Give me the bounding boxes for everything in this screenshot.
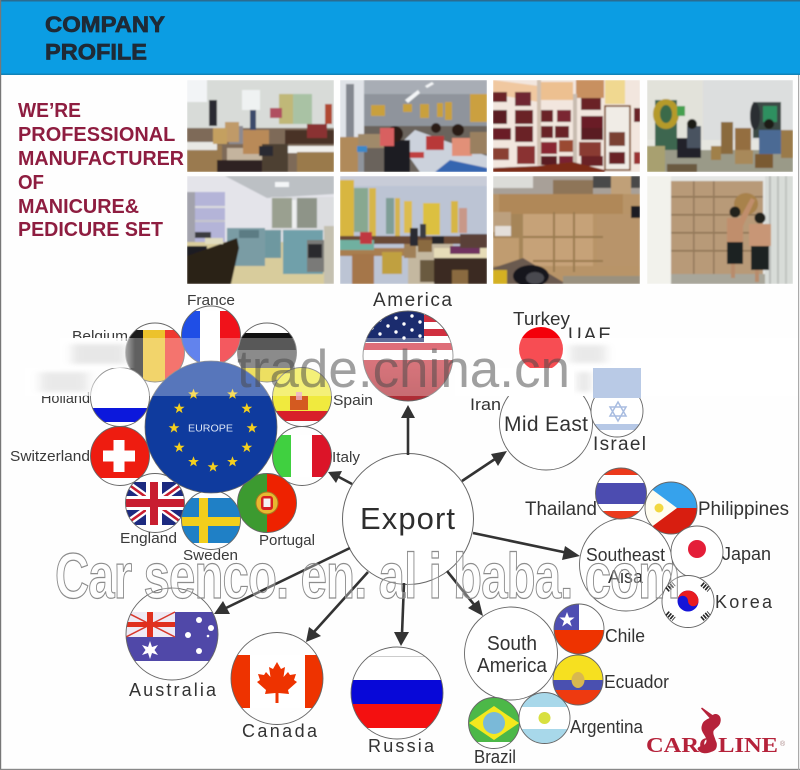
heading: company profile: COMPANY	[45, 12, 165, 37]
labels: Southeast Asia countries: Thailand	[525, 499, 597, 520]
flag: England	[125, 474, 185, 532]
flag: Philippines	[642, 482, 697, 534]
photo: loading container	[647, 176, 793, 284]
label: America: America	[373, 290, 452, 311]
labels: Mid East countries	[470, 395, 646, 455]
flag: Portugal	[237, 473, 298, 533]
flag: Germany	[237, 323, 297, 388]
panel: South America circle: South	[487, 633, 537, 655]
labels: Australia, Canada, Russia: Russia	[368, 736, 435, 756]
flag: France	[181, 306, 241, 362]
flag: Turkey	[519, 327, 563, 371]
flag: Israel	[590, 398, 644, 438]
labels: Mid East countries: Israel	[593, 434, 646, 455]
photo: press machines	[647, 80, 793, 172]
panel: South America circle: America	[477, 655, 548, 677]
photo: showroom shelves	[493, 80, 640, 172]
arrow: to South America	[447, 571, 483, 616]
label: Turkey: Turkey	[513, 309, 570, 329]
text block: professional manufacturer: OF	[18, 172, 44, 194]
flag: Belgium	[125, 322, 185, 382]
flag: Australia	[126, 588, 218, 680]
panel: Southeast Asia circle: Southeast	[586, 545, 665, 565]
arrow: to Canada	[306, 572, 368, 642]
arrow: to Italy	[328, 471, 352, 484]
text block: professional manufacturer: PEDICURE SET	[18, 219, 163, 241]
photo: office	[187, 176, 334, 284]
labels: Australia, Canada, Russia: Canada	[242, 721, 318, 741]
text block: professional manufacturer: MANICURE&	[18, 196, 139, 218]
panel: Mid East circle	[500, 377, 592, 470]
flag: Thailand	[595, 468, 647, 520]
labels: Europe countries: Holland	[41, 390, 90, 407]
flag: Brazil	[468, 697, 520, 749]
labels: South America countries: Brazil	[474, 747, 516, 767]
label: UAE: UAE	[568, 325, 611, 346]
labels: Southeast Asia countries: Philippines	[698, 499, 789, 520]
photo: workers at table	[340, 80, 487, 172]
logo: Caroline	[646, 708, 786, 757]
photo: workshop with boxes	[187, 80, 334, 172]
labels: Europe countries: Belgium	[72, 328, 128, 345]
photo: workshop with curtains	[340, 176, 487, 284]
text block: professional manufacturer: PROFESSIONAL	[18, 124, 175, 146]
flag: Italy	[272, 426, 332, 486]
labels: Australia, Canada, Russia	[129, 680, 435, 756]
flag: Ecuador	[552, 655, 604, 706]
labels: Europe countries	[10, 292, 373, 564]
panel: South America circle	[464, 607, 558, 700]
labels: Europe countries: Italy	[332, 449, 361, 466]
heading: company profile: PROFILE	[45, 40, 147, 64]
labels: Europe countries: Spain	[333, 392, 373, 409]
watermark bands	[25, 338, 800, 398]
header band	[0, 0, 800, 75]
labels: South America countries: Chile	[605, 626, 645, 646]
logo: Caroline: CAROLINE	[646, 733, 778, 757]
watermark: trade.china.cn: trade.china.cn	[237, 340, 570, 399]
labels: Mid East countries: Iran	[470, 395, 501, 414]
labels: Europe countries: Sweden	[183, 547, 238, 564]
labels: Europe countries: Switzerland	[10, 448, 90, 465]
labels: Southeast Asia countries: Japan	[722, 544, 771, 564]
labels: South America countries: Argentina	[570, 717, 644, 737]
labels: Europe countries: Portugal	[259, 532, 315, 549]
labels: Europe countries: England	[120, 530, 177, 547]
logo: Caroline: ®	[780, 740, 786, 748]
text block: professional manufacturer: MANUFACTURER	[18, 148, 185, 170]
flag: Canada	[230, 632, 325, 724]
flag: Russia	[351, 647, 443, 739]
flag: Argentina	[518, 692, 572, 744]
text block: professional manufacturer: WE’RE	[18, 100, 81, 122]
arrow: to Southeast Asia	[473, 533, 580, 560]
flag: Holland	[90, 366, 150, 428]
panel: Southeast Asia circle: Aisa	[608, 567, 644, 587]
flag: Spain	[272, 366, 332, 426]
watermark: Carsenco.en.alibaba.com: Car senco. en. al i baba. com	[55, 540, 680, 612]
panel: Europe circle	[145, 361, 277, 493]
panel: Southeast Asia circle	[580, 518, 672, 611]
flag: Switzerland	[90, 426, 150, 486]
arrow: to Australia	[214, 548, 350, 614]
panel: Mid East circle: Mid East	[504, 413, 588, 436]
arrow: to America	[401, 405, 415, 455]
labels: Europe countries: France	[187, 292, 235, 309]
flag: America	[362, 310, 454, 402]
arrow: to Mid East	[462, 451, 507, 481]
labels: Australia, Canada, Russia: Australia	[129, 680, 217, 700]
flag: Sweden	[181, 490, 241, 550]
panel: Export hub: Export	[360, 501, 455, 536]
labels: Southeast Asia countries: Korea	[715, 592, 773, 612]
labels: Southeast Asia countries	[525, 499, 789, 612]
flag: Chile	[553, 603, 605, 656]
panel: Export hub	[342, 454, 474, 584]
flag: Japan	[671, 526, 723, 578]
panel: Europe circle: EUROPE	[188, 422, 233, 434]
labels: South America countries	[474, 626, 669, 767]
flag: Korea	[662, 576, 714, 628]
arrow: to Russia	[394, 583, 409, 646]
photo: warehouse cartons	[493, 176, 640, 284]
labels: South America countries: Ecuador	[604, 672, 669, 692]
